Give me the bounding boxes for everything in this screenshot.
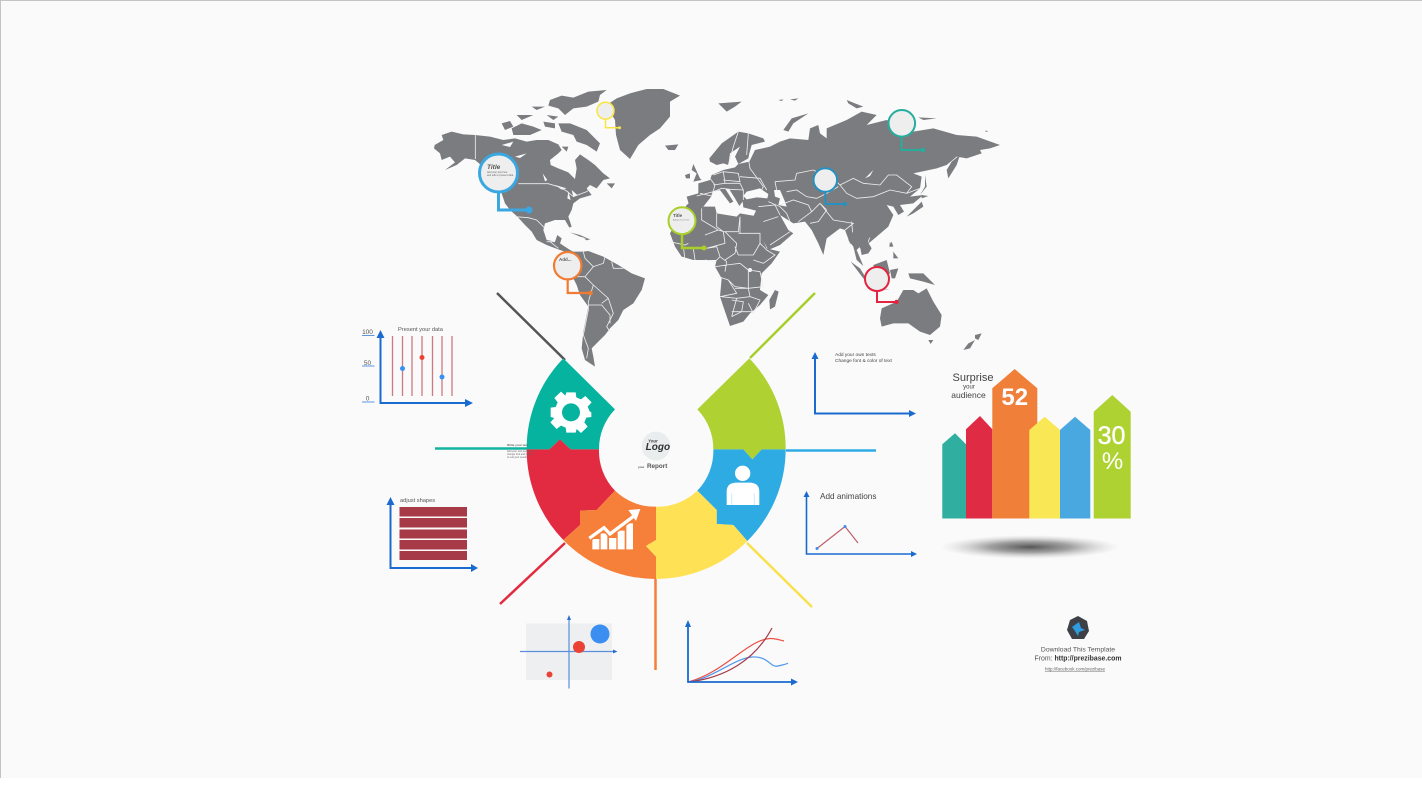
chart heading: audience	[951, 390, 986, 400]
line chart: add animations	[804, 491, 917, 557]
north america and greenland	[434, 89, 680, 258]
pin: teal	[888, 110, 925, 152]
curve chart	[685, 620, 798, 686]
pin: red	[865, 267, 899, 304]
pin: orange: Add...	[559, 257, 572, 262]
chart heading: your	[963, 384, 975, 390]
empty axis chart: add your own texts: Change font & color of text	[835, 358, 892, 364]
arrow bar chart: %	[1102, 448, 1123, 475]
axis labels: 50	[364, 360, 371, 367]
pin: blue title: Add your text here	[487, 171, 508, 174]
chart heading	[951, 372, 993, 400]
icon: gear	[550, 392, 592, 433]
segment: yellow	[646, 491, 747, 579]
pin: blue title	[480, 154, 532, 214]
download credit: http://facebook.com/prezibase	[1045, 666, 1106, 672]
bubble chart	[520, 615, 618, 688]
logo badge	[642, 432, 670, 460]
small notes text: to suit your needs	[507, 456, 527, 459]
segment: green	[697, 358, 786, 459]
axis labels	[362, 329, 373, 402]
download credit: Download This Template	[1041, 646, 1115, 654]
pin: blue title: and edit to present data	[487, 174, 514, 177]
report label: your Report	[638, 463, 668, 470]
line chart: present your data: Present your data	[398, 327, 444, 333]
bar label: 52: 52	[1001, 384, 1028, 411]
bar label: 30 percent: 30	[1098, 422, 1125, 450]
empty axis chart: add your own texts: Add your own texts	[835, 352, 876, 358]
donut diagram	[527, 358, 786, 579]
small notes text: change font and colour	[507, 453, 533, 456]
pin: green title: Add your text here	[673, 218, 690, 222]
pin: green title: Title	[673, 213, 683, 218]
pin: blue title: Title	[487, 164, 501, 171]
segment: teal	[527, 358, 615, 449]
icon: person	[727, 466, 759, 505]
segment: blue	[697, 449, 786, 541]
segment: orange	[563, 491, 656, 579]
small notes text	[507, 443, 535, 459]
empty axis chart: add your own texts	[812, 352, 916, 417]
bar chart: adjust shapes: adjust shapes	[400, 498, 435, 504]
download credit: From: http://prezibase.com	[1035, 656, 1121, 662]
download credit	[1035, 616, 1121, 672]
line chart: add animations: Add animations	[820, 492, 876, 501]
south america	[567, 248, 645, 367]
icon: growth chart	[589, 509, 640, 549]
chart heading: Surprise	[953, 372, 993, 384]
connector lines	[435, 293, 876, 670]
pin: orange	[554, 252, 593, 295]
eurasia	[685, 98, 1000, 255]
bar chart: adjust shapes	[386, 497, 478, 572]
chart shadow	[940, 535, 1120, 559]
africa, southeast asia and australia	[670, 200, 982, 350]
segment: red	[527, 439, 615, 540]
pin: yellow	[597, 102, 621, 129]
arrow bar chart	[942, 369, 1131, 518]
axis labels: 0	[366, 396, 370, 402]
pin: dark blue	[814, 168, 847, 206]
small notes text: Write your text	[507, 443, 528, 447]
small notes text: Add your own texts here	[507, 450, 535, 453]
logo badge: Logo	[646, 442, 670, 453]
logo badge: Your	[648, 438, 658, 443]
axis labels: 100	[362, 329, 373, 336]
line chart: present your data	[362, 327, 473, 407]
icon: prezibase logo	[1067, 616, 1089, 639]
pin: green title	[668, 207, 706, 250]
world map	[434, 89, 1000, 367]
